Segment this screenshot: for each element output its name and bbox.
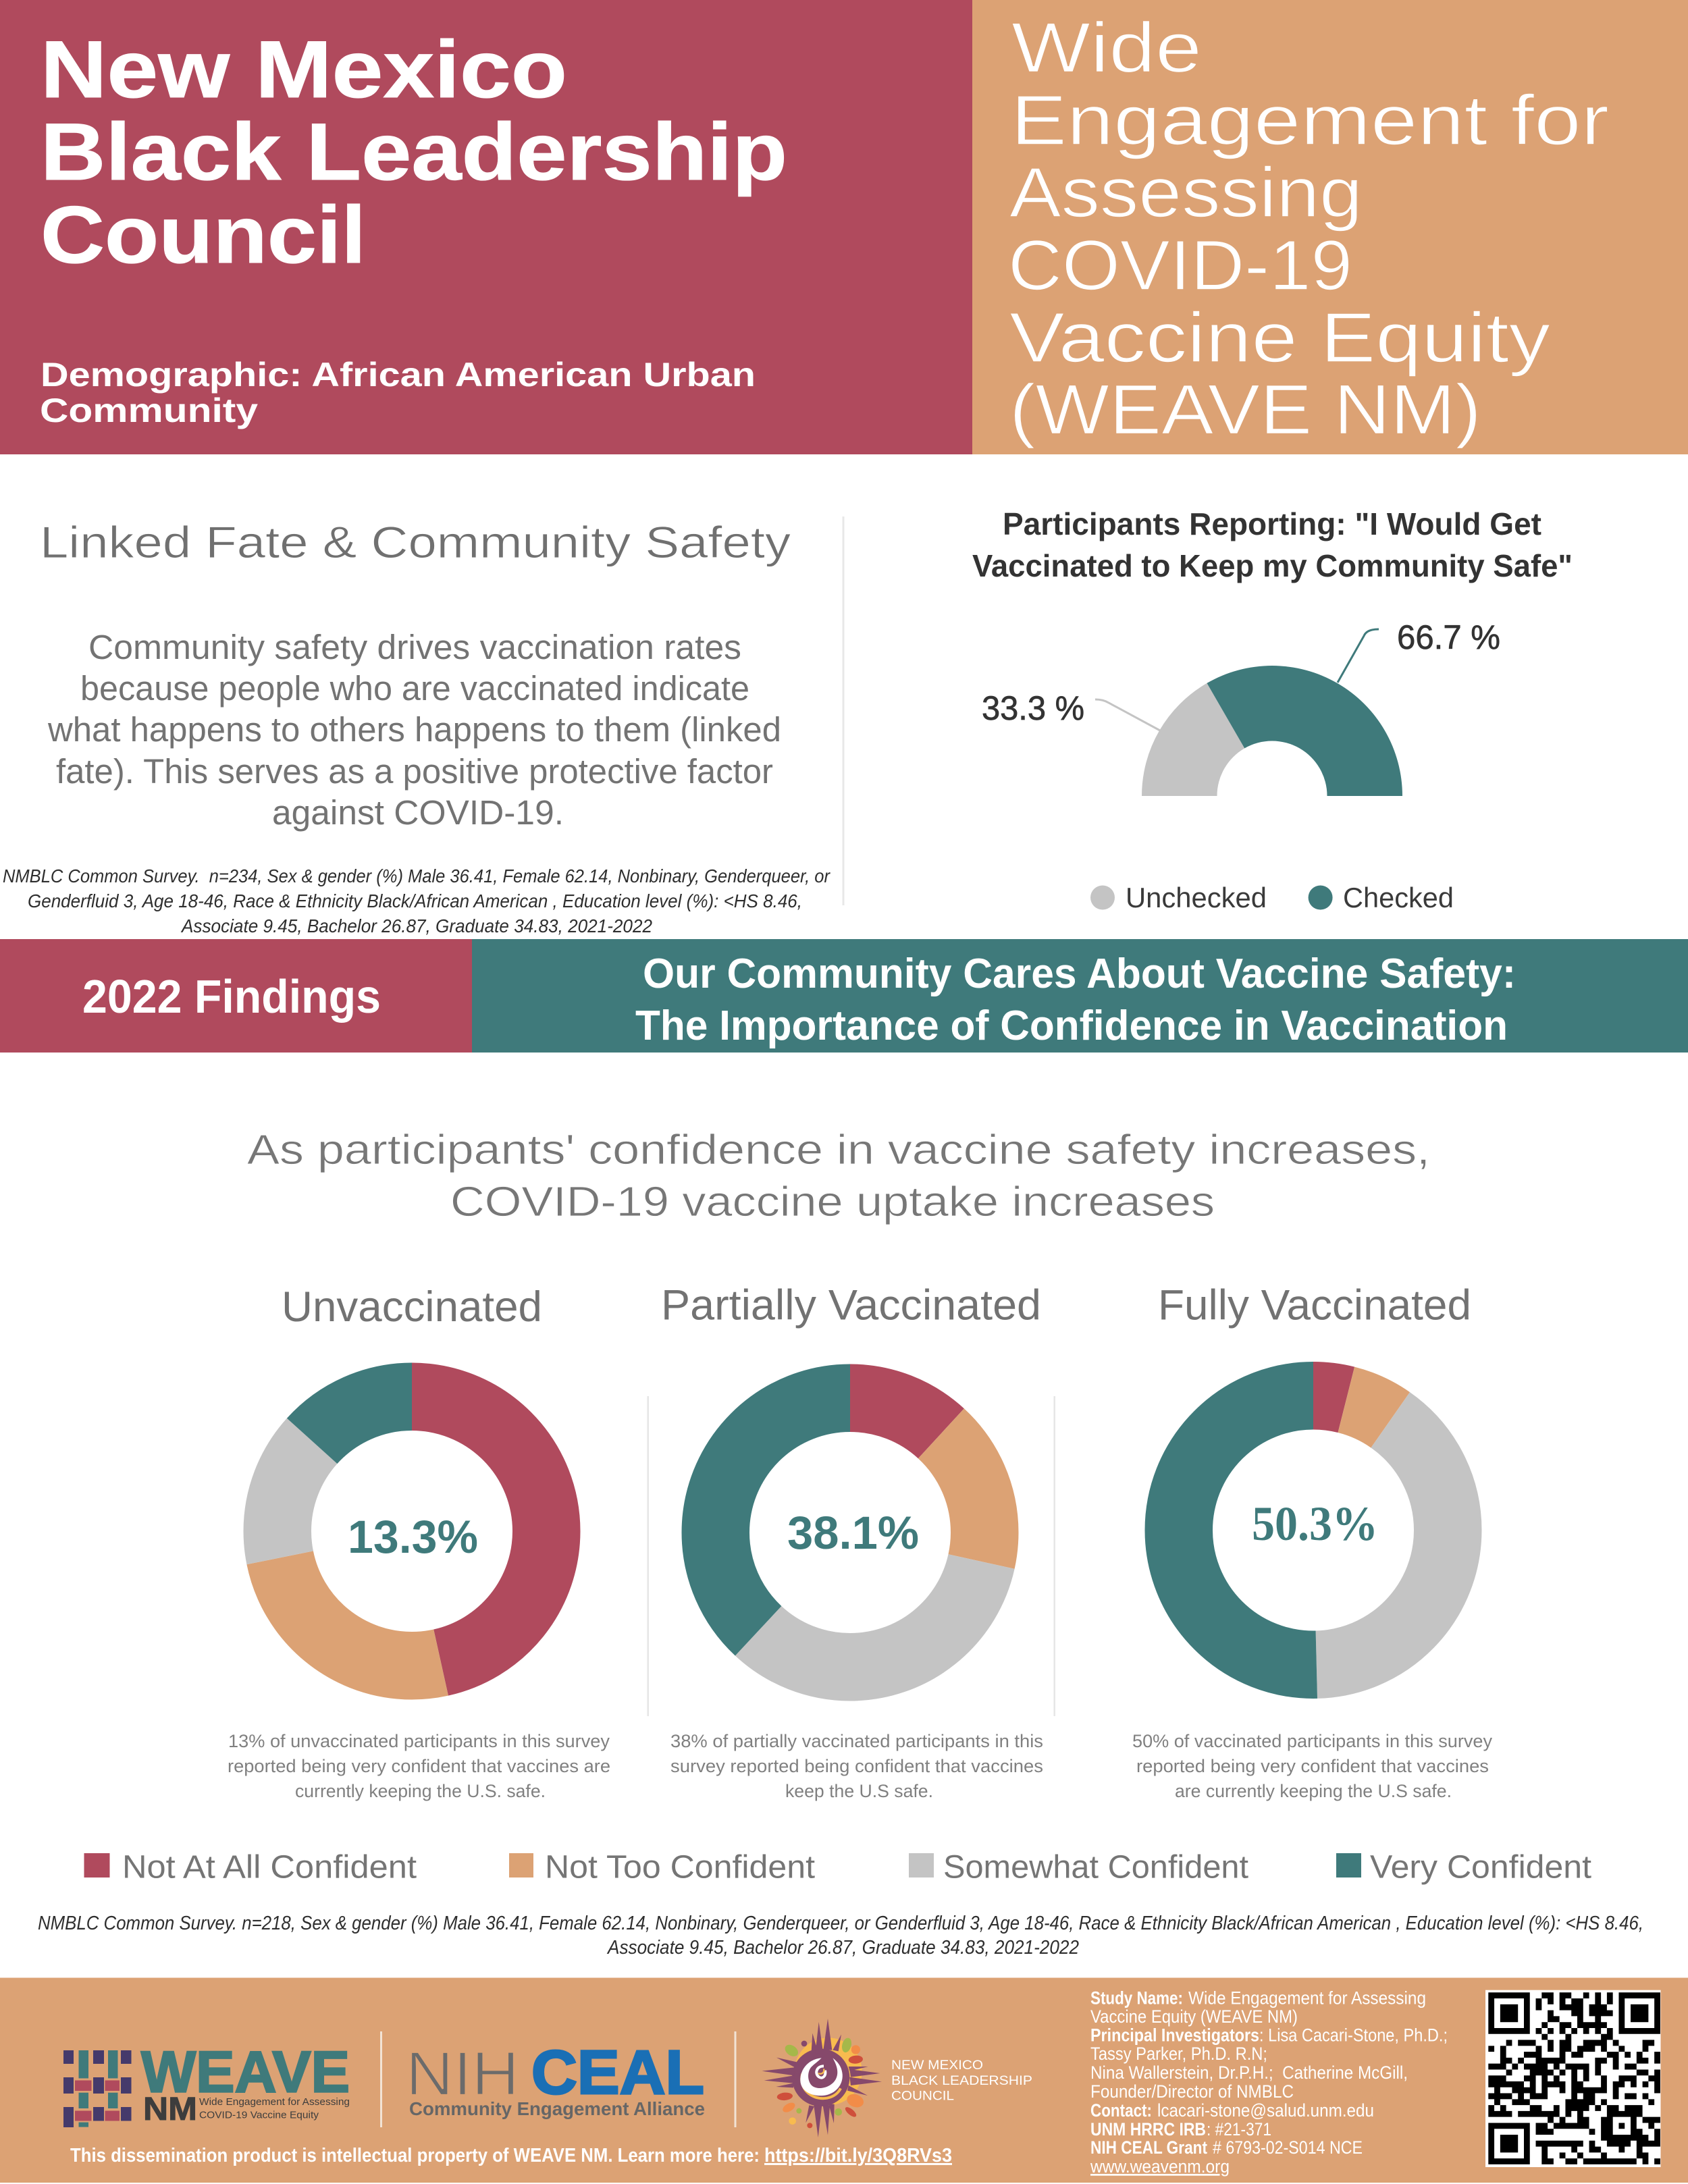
leader line: unchecked (1095, 699, 1160, 730)
survey footnote: Genderfluid 3, Age 18-46, Race & Ethnicity Black/African American , Education level (%): <HS 8.46, (28, 890, 802, 911)
body text: Community safety drives vaccination rates (88, 628, 741, 666)
survey footnote: Associate 9.45, Bachelor 26.87, Graduate 34.83, 2021-2022 (180, 915, 652, 936)
title: New Mexico Black Leadership Council: Black Leadership (41, 107, 787, 197)
study title: (WEAVE NM) (1009, 370, 1481, 450)
body text: what happens to others happens to them (linked (47, 710, 781, 749)
segment: unchecked (1142, 683, 1244, 796)
body text (47, 628, 781, 832)
panel: unvaccinated (228, 1283, 610, 1801)
segment: checked (1207, 666, 1402, 796)
chart title (972, 506, 1573, 583)
demographic subtitle: Demographic: African American Urban (41, 356, 756, 394)
survey footnote: NMBLC Common Survey. n=234, Sex & gender (%) Male 36.41, Female 62.14, Nonbinary, Genderqueer, or (3, 865, 831, 886)
leader line: checked (1338, 629, 1379, 683)
study details: Contact: (1090, 2100, 1152, 2121)
caption: currently keeping the U.S. safe. (295, 1781, 546, 1801)
caption: 38% of partially vaccinated participants in this (670, 1731, 1043, 1751)
title: New Mexico Black Leadership Council (41, 24, 787, 280)
value label: 33.3: 33.3 % (982, 689, 1084, 727)
center value: 13.3% (348, 1511, 478, 1563)
legend: confidence levels: Not Too Confident (545, 1850, 815, 1885)
donut chart (716, 1398, 984, 1667)
body text: because people who are vaccinated indicate (80, 669, 749, 708)
caption: reported being very confident that vaccines are (228, 1756, 610, 1776)
legend: confidence levels: Very Confident (1370, 1850, 1591, 1885)
study title: COVID-19 (1008, 226, 1352, 305)
survey footnote: Associate 9.45, Bachelor 26.87, Graduate 34.83, 2021-2022 (606, 1937, 1079, 1959)
wordmark: WEAVE: WEAVE (141, 2040, 350, 2105)
legend: confidence levels: Somewhat Confident (943, 1850, 1248, 1885)
header panel: study name (972, 0, 1688, 454)
body text: fate). This serves as a positive protective factor (56, 752, 773, 791)
logo text: NEW MEXICO (891, 2058, 983, 2073)
study details (1090, 1988, 1448, 2177)
chart title: Vaccinated to Keep my Community Safe" (972, 548, 1573, 583)
study title: Wide (1011, 8, 1202, 88)
panel: linked fate and community safety (3, 517, 831, 936)
dissemination statement with link: This dissemination product is intellectual property of WEAVE NM. Learn more here: (70, 2145, 760, 2166)
heading: linked fate: Linked Fate & Community Safety (40, 517, 791, 567)
logo tagline (199, 2097, 350, 2121)
caption: 50% of vaccinated participants in this survey (1132, 1731, 1492, 1751)
study details: www.weavenm.org (1090, 2156, 1230, 2177)
banner: community cares about vaccine safety (472, 939, 1688, 1053)
logo: NMBLC sun (762, 2019, 1032, 2137)
logo: NIH CEAL: Community Engagement Alliance (409, 2098, 705, 2119)
study details: Study Name: (1090, 1988, 1183, 2008)
caption: keep the U.S safe. (785, 1781, 933, 1801)
study title: Engagement for (1011, 81, 1609, 160)
logo: WEAVE NM (63, 2040, 350, 2127)
banner: community cares about vaccine safety: Our Community Cares About Vaccine Safety: (643, 951, 1516, 997)
dissemination statement with link: https://bit.ly/3Q8RVs3 (764, 2145, 952, 2166)
title: New Mexico Black Leadership Council: New Mexico (41, 24, 567, 115)
logo text: COUNCIL (891, 2089, 954, 2104)
banner: 2022 findings: 2022 Findings (82, 970, 381, 1023)
banner: 2022 findings (0, 939, 472, 1053)
caption: reported being very confident that vaccines (1136, 1756, 1489, 1776)
logo text: BLACK LEADERSHIP (891, 2074, 1032, 2088)
study details: Founder/Director of NMBLC (1090, 2081, 1294, 2102)
study details: NIH CEAL Grant (1090, 2137, 1207, 2158)
logo text (891, 2058, 1032, 2104)
footer panel (0, 1978, 1688, 2183)
panel: partially vaccinated (661, 1281, 1043, 1801)
donut chart (1179, 1395, 1448, 1665)
demographic subtitle (40, 356, 756, 429)
survey footnote (3, 865, 831, 936)
study details: Nina Wallerstein, Dr.P.H.; Catherine McGill, (1090, 2062, 1408, 2083)
heading: Fully Vaccinated (1158, 1281, 1471, 1329)
study title (1008, 8, 1609, 450)
legend: unchecked and checked: Checked (1343, 882, 1454, 913)
study details: : Lisa Cacari-Stone, Ph.D.; (1259, 2025, 1448, 2046)
logo: NIH CEAL (406, 2038, 705, 2119)
heading: confidence and uptake: COVID-19 vaccine uptake increases (450, 1179, 1215, 1225)
chart title: Participants Reporting: "I Would Get (1003, 506, 1541, 541)
banner: community cares about vaccine safety: The Importance of Confidence in Vaccination (635, 1003, 1508, 1049)
study details: # 6793-02-S014 NCE (1213, 2137, 1363, 2158)
study details: Principal Investigators (1090, 2025, 1259, 2046)
logo tagline: Wide Engagement for Assessing (199, 2097, 350, 2108)
heading: confidence and uptake (247, 1127, 1430, 1225)
caption (228, 1731, 610, 1801)
study details: : #21-371 (1207, 2119, 1271, 2139)
icon: woven squares (63, 2050, 131, 2127)
value label: 66.7: 66.7 % (1397, 618, 1500, 656)
study title: Assessing (1009, 153, 1363, 232)
legend: unchecked and checked (1090, 882, 1454, 913)
legend: confidence levels (84, 1850, 1591, 1885)
heading: confidence and uptake: As participants' confidence in vaccine safety increases, (247, 1127, 1430, 1173)
logo tagline: COVID-19 Vaccine Equity (199, 2110, 319, 2121)
legend: confidence levels: Not At All Confident (122, 1850, 417, 1885)
title: New Mexico Black Leadership Council: Council (41, 190, 366, 280)
donut chart (278, 1397, 546, 1666)
wordmark: NM: NM (143, 2092, 197, 2127)
heading: Partially Vaccinated (661, 1281, 1041, 1329)
panel: fully vaccinated (1132, 1281, 1492, 1801)
QR code (1485, 1990, 1661, 2167)
study details: Wide Engagement for Assessing (1188, 1988, 1426, 2008)
heading: Unvaccinated (282, 1283, 542, 1331)
panel: community safety half donut (972, 506, 1573, 913)
center value: 38.1% (787, 1507, 919, 1559)
study title: Vaccine Equity (1009, 298, 1551, 377)
logo: NIH CEAL: NIH (406, 2040, 519, 2108)
caption: are currently keeping the U.S safe. (1175, 1781, 1452, 1801)
icon: sun spiral (762, 2019, 882, 2137)
demographic subtitle: Community (40, 392, 258, 429)
study details: Tassy Parker, Ph.D. R.N; (1090, 2044, 1267, 2064)
study details: UNM HRRC IRB (1090, 2119, 1206, 2139)
caption: 13% of unvaccinated participants in this survey (228, 1731, 610, 1751)
body text: against COVID-19. (272, 793, 564, 832)
caption (670, 1731, 1043, 1801)
legend: unchecked and checked: Unchecked (1126, 882, 1267, 913)
caption: survey reported being confident that vaccines (670, 1756, 1043, 1776)
study details: lcacari-stone@salud.unm.edu (1157, 2100, 1374, 2121)
survey footnote (38, 1913, 1643, 1959)
logo: NIH CEAL: CEAL (531, 2038, 704, 2107)
study details: Vaccine Equity (WEAVE NM) (1090, 2006, 1298, 2027)
center value: 50.3% (1252, 1497, 1378, 1551)
caption (1132, 1731, 1492, 1801)
header panel: organization (0, 0, 972, 454)
half donut chart (1142, 666, 1402, 796)
